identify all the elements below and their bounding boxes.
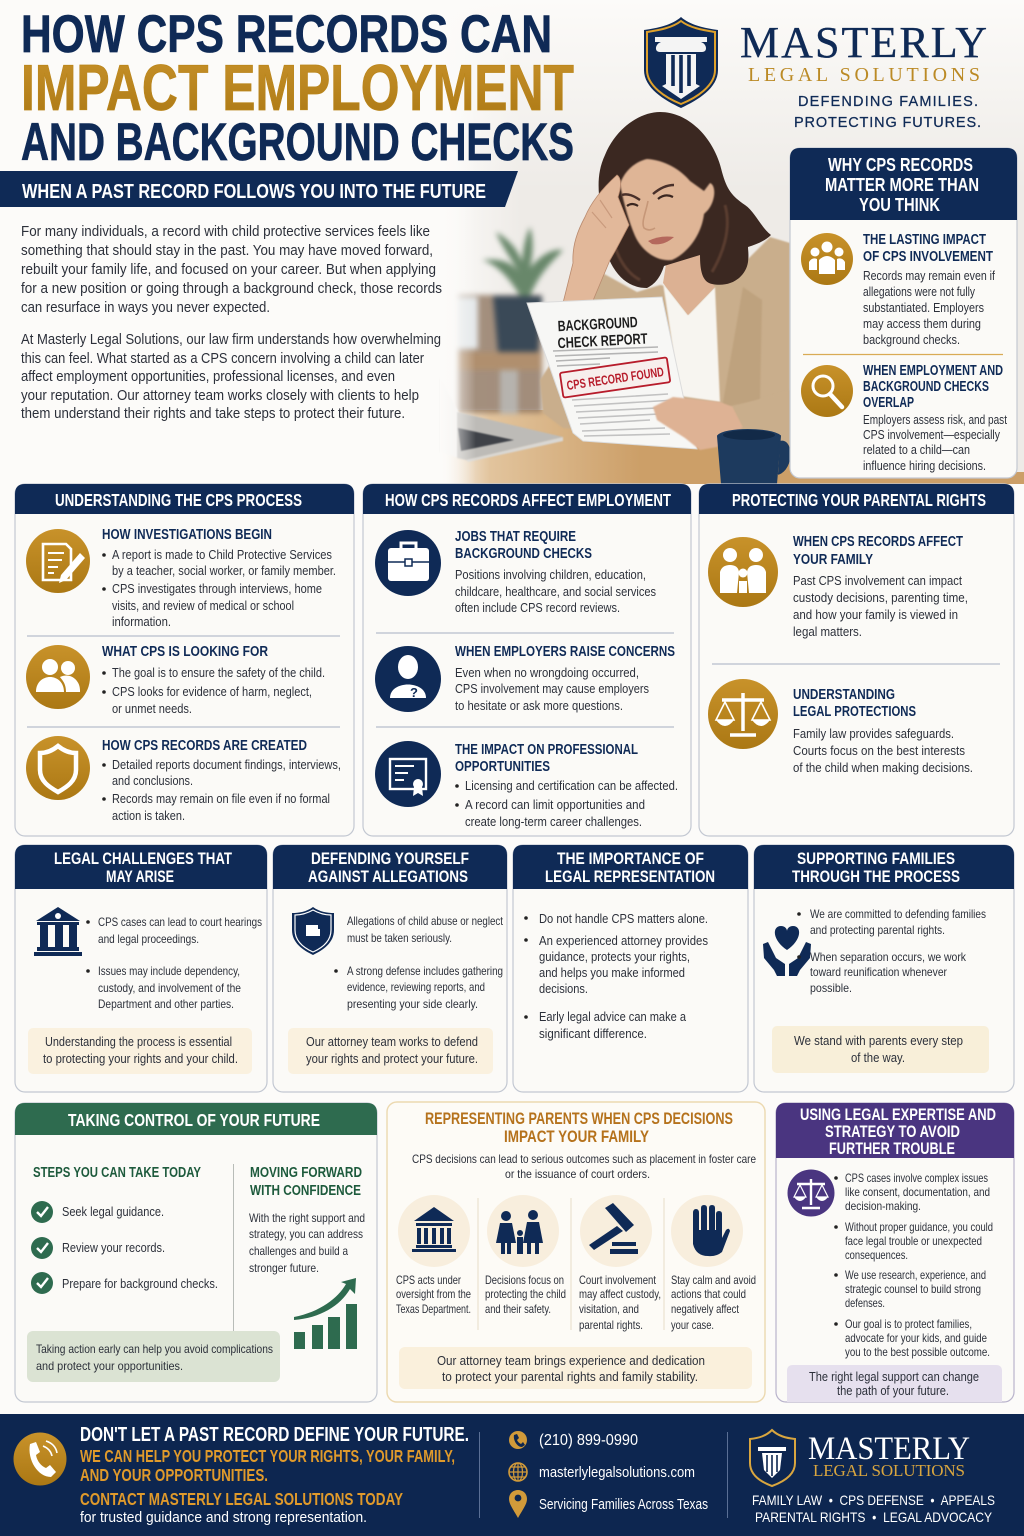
panel header bbox=[15, 1103, 377, 1135]
subtitle banner bbox=[0, 171, 518, 207]
section: how records are created bbox=[102, 738, 341, 823]
logo: Masterly Legal Solutions bbox=[644, 17, 987, 131]
callout: to protecting your rights and your child. bbox=[43, 1052, 238, 1066]
section: jobs requiring checks: JOBS THAT REQUIRE bbox=[455, 529, 576, 545]
background shelf and plant bbox=[458, 227, 563, 414]
section: when records affect family: and how your family is viewed in bbox=[793, 608, 958, 622]
panel title: REPRESENTING PARENTS WHEN CPS DECISIONS bbox=[425, 1110, 733, 1128]
footer logo: PARENTAL RIGHTS • LEGAL ADVOCACY bbox=[755, 1509, 993, 1525]
panel header: STRATEGY TO AVOID bbox=[825, 1123, 960, 1141]
text: moving forward: stronger future. bbox=[249, 1261, 319, 1275]
icon: courthouse bbox=[398, 1195, 470, 1267]
text: challenge bullets: and legal proceedings. bbox=[98, 932, 199, 946]
panel header bbox=[790, 148, 1017, 220]
text: expertise bullets: advocate for your kids, and guide bbox=[845, 1331, 987, 1345]
text: defense bullets: evidence, reviewing reports, and bbox=[347, 980, 485, 994]
hero photo: stressed woman reading background check report bbox=[440, 0, 1024, 484]
callout bbox=[772, 1026, 989, 1073]
text: representation bullets: guidance, protects your rights, bbox=[539, 950, 690, 964]
panel header bbox=[513, 845, 748, 889]
section: professional opportunities: create long-term career challenges. bbox=[465, 815, 642, 829]
icon: briefcase bbox=[375, 530, 441, 596]
icon: family group bbox=[801, 233, 853, 285]
icon: shield with column bbox=[644, 17, 718, 108]
main title: IMPACT EMPLOYMENT bbox=[21, 51, 574, 124]
intro paragraph two bbox=[21, 332, 441, 422]
section: how records are created: HOW CPS RECORDS ARE CREATED bbox=[102, 738, 307, 754]
logo: Masterly Legal Solutions: LEGAL SOLUTIONS bbox=[748, 64, 980, 86]
panel header: TAKING CONTROL OF YOUR FUTURE bbox=[68, 1110, 320, 1130]
text: defense bullets: must be taken seriously. bbox=[347, 931, 452, 945]
panel header bbox=[15, 845, 267, 889]
section: what CPS is looking for bbox=[102, 644, 325, 716]
section: lasting impact: OF CPS INVOLVEMENT bbox=[863, 249, 993, 265]
panel: taking control of your future bbox=[15, 1103, 377, 1402]
heading: steps you can take today: STEPS YOU CAN TAKE TODAY bbox=[33, 1165, 201, 1181]
section: lasting impact: substantiated. Employers bbox=[863, 301, 984, 315]
callout bbox=[787, 1365, 1002, 1402]
callout: of the way. bbox=[851, 1051, 905, 1065]
call to action text bbox=[80, 1423, 469, 1526]
panel: legal challenges that may arise bbox=[15, 845, 267, 1092]
hair bbox=[599, 112, 771, 288]
paper heading: BACKGROUND bbox=[557, 314, 638, 335]
section: how investigations begin: CPS investigates through interviews, home bbox=[112, 582, 322, 596]
text: expertise bullets: defenses. bbox=[845, 1296, 885, 1310]
main title: HOW CPS RECORDS CAN bbox=[21, 5, 552, 64]
footer band bbox=[0, 1414, 1024, 1536]
section: when records affect family: WHEN CPS RECORDS AFFECT bbox=[793, 534, 963, 550]
text: expertise bullets: Our goal is to protect families, bbox=[845, 1317, 972, 1331]
panel title bbox=[425, 1110, 733, 1146]
callout: to protect your parental rights and family stability. bbox=[442, 1370, 698, 1384]
section: how investigations begin: visits, and review of medical or school bbox=[112, 599, 294, 613]
panel header: THROUGH THE PROCESS bbox=[792, 868, 960, 886]
section: what CPS is looking for: WHAT CPS IS LOOKING FOR bbox=[102, 644, 268, 660]
heading: moving forward: WITH CONFIDENCE bbox=[250, 1183, 361, 1199]
neck bbox=[663, 240, 715, 315]
panel: importance of legal representation bbox=[513, 845, 748, 1092]
call to action text: CONTACT MASTERLY LEGAL SOLUTIONS TODAY bbox=[80, 1489, 403, 1509]
section: jobs requiring checks: Positions involving children, education, bbox=[455, 568, 646, 582]
callout bbox=[288, 1028, 493, 1074]
panel header bbox=[15, 484, 354, 514]
intro text: or the issuance of court orders. bbox=[505, 1167, 650, 1181]
intro paragraph two: them understand their rights and take steps to protect their future. bbox=[21, 406, 405, 422]
panel header: YOU THINK bbox=[859, 194, 941, 215]
text: expertise bullets bbox=[834, 1171, 993, 1359]
text: expertise bullets: like consent, documentation, and bbox=[845, 1185, 990, 1199]
columns of text: Court involvement bbox=[579, 1273, 657, 1287]
section: legal protections: UNDERSTANDING bbox=[793, 687, 895, 703]
callout: We stand with parents every step bbox=[794, 1034, 963, 1048]
intro paragraph one: something that should stay in the past. You may have moved forward, bbox=[21, 243, 433, 259]
section: legal protections bbox=[793, 687, 973, 775]
contact: phone: (210) 899-0990 bbox=[539, 1432, 638, 1449]
icon: shield bbox=[26, 736, 90, 800]
section: when records affect family: custody decisions, parenting time, bbox=[793, 591, 968, 605]
footer logo: LEGAL SOLUTIONS bbox=[813, 1461, 965, 1480]
text: expertise bullets: you to the best possible outcome. bbox=[845, 1345, 990, 1359]
contact: location: Servicing Families Across Texas bbox=[539, 1496, 708, 1513]
icon: scales bbox=[788, 1170, 834, 1216]
section: lasting impact: THE LASTING IMPACT bbox=[863, 232, 986, 248]
section: legal protections: LEGAL PROTECTIONS bbox=[793, 704, 916, 720]
callout: Our attorney team brings experience and dedication bbox=[437, 1354, 705, 1368]
intro paragraph one: For many individuals, a record with child protective services feels like bbox=[21, 224, 430, 240]
callout bbox=[399, 1347, 752, 1389]
intro paragraph two: your reputation. Our attorney team works closely with clients to help bbox=[21, 388, 419, 404]
text: representation bullets: An experienced attorney provides bbox=[539, 934, 708, 948]
text: support bullets: and protecting parental rights. bbox=[810, 923, 945, 937]
section: when records affect family bbox=[793, 534, 968, 639]
icon: phone bbox=[14, 1432, 66, 1486]
text: defense bullets bbox=[334, 914, 504, 1011]
columns of text: Texas Department. bbox=[396, 1302, 471, 1316]
columns of text: protecting the child bbox=[485, 1287, 566, 1301]
contact: location bbox=[509, 1490, 708, 1518]
intro text: CPS decisions can lead to serious outcomes such as placement in foster care bbox=[412, 1152, 756, 1166]
icon: person with question mark: ? bbox=[410, 685, 418, 700]
panel header: FURTHER TROUBLE bbox=[829, 1140, 955, 1158]
intro paragraph one: rebuilt your family life, and focused on your career. But when applying bbox=[21, 262, 436, 278]
text: moving forward bbox=[249, 1211, 365, 1275]
contact: phone bbox=[509, 1431, 638, 1449]
footer logo bbox=[750, 1430, 995, 1525]
CPS record found stamp: CPS RECORD FOUND bbox=[566, 364, 665, 393]
section: employment overlap: influence hiring decisions. bbox=[863, 459, 986, 473]
icon: gavel bbox=[580, 1195, 652, 1267]
panel header: AGAINST ALLEGATIONS bbox=[308, 868, 468, 886]
text: defense bullets: presenting your side clearly. bbox=[347, 997, 478, 1011]
icon: shield with column bbox=[750, 1430, 795, 1486]
section: what CPS is looking for: CPS looks for evidence of harm, neglect, bbox=[112, 685, 312, 699]
icon: certificate bbox=[375, 741, 441, 807]
section: legal protections: of the child when making decisions. bbox=[793, 761, 973, 775]
section: when records affect family: legal matters. bbox=[793, 625, 862, 639]
section: legal protections: Courts focus on the best interests bbox=[793, 744, 965, 758]
text: moving forward: With the right support and bbox=[249, 1211, 365, 1225]
intro paragraph one: for a new position or going through a background check, those records bbox=[21, 281, 442, 297]
text: defense bullets: Allegations of child abuse or neglect bbox=[347, 914, 504, 928]
face bbox=[620, 159, 714, 260]
columns of text: oversight from the bbox=[396, 1287, 471, 1301]
shirt bbox=[663, 283, 720, 402]
callout: and protect your opportunities. bbox=[36, 1359, 183, 1373]
columns of text: negatively affect bbox=[671, 1302, 740, 1316]
section: how investigations begin: A report is made to Child Protective Services bbox=[112, 548, 332, 562]
subtitle banner: WHEN A PAST RECORD FOLLOWS YOU INTO THE FUTURE bbox=[22, 180, 486, 203]
section: employment overlap bbox=[863, 363, 1007, 473]
intro paragraph one bbox=[21, 224, 442, 316]
panel header: LEGAL CHALLENGES THAT bbox=[54, 850, 232, 868]
text: expertise bullets: face legal trouble or unexpected bbox=[845, 1234, 982, 1248]
text: challenge bullets: Department and other parties. bbox=[98, 997, 234, 1011]
text: expertise bullets: consequences. bbox=[845, 1248, 908, 1262]
hand holding paper bbox=[653, 397, 743, 450]
callout: Taking action early can help you avoid complications bbox=[36, 1342, 273, 1356]
paper heading bbox=[556, 314, 648, 352]
text: moving forward: challenges and build a bbox=[249, 1244, 348, 1258]
panel: representing parents bbox=[387, 1102, 765, 1402]
section: when records affect family: YOUR FAMILY bbox=[793, 552, 873, 568]
panel: defending yourself bbox=[273, 845, 507, 1092]
section: employers raise concerns bbox=[455, 644, 675, 713]
section: jobs requiring checks: often include CPS record reviews. bbox=[455, 601, 620, 615]
intro paragraph one: can resurface in ways you never expected. bbox=[21, 300, 270, 316]
columns of text: may affect custody, bbox=[579, 1287, 661, 1301]
text: challenge bullets: Issues may include dependency, bbox=[98, 964, 240, 978]
logo: Masterly Legal Solutions: MASTERLY bbox=[740, 18, 987, 67]
icon: family bbox=[487, 1195, 559, 1267]
text: support bullets: possible. bbox=[810, 981, 852, 995]
icon: person with question mark bbox=[375, 646, 441, 712]
intro paragraph two: At Masterly Legal Solutions, our law firm understands how overwhelming bbox=[21, 332, 441, 348]
icon: parents and child bbox=[708, 537, 778, 607]
section: employment overlap: related to a child—can bbox=[863, 443, 970, 457]
call to action text: WE CAN HELP YOU PROTECT YOUR RIGHTS, YOUR FAMILY, bbox=[80, 1446, 455, 1466]
columns of text bbox=[396, 1273, 756, 1332]
checklist: Seek legal guidance. bbox=[62, 1205, 164, 1219]
text: challenge bullets: custody, and involvement of the bbox=[98, 981, 241, 995]
section: how records are created: action is taken. bbox=[112, 809, 185, 823]
section: employers raise concerns: to hesitate or ask more questions. bbox=[455, 699, 623, 713]
section: what CPS is looking for: or unmet needs. bbox=[112, 702, 192, 716]
logo: Masterly Legal Solutions: PROTECTING FUTURES. bbox=[794, 115, 981, 131]
coffee mug bbox=[718, 430, 790, 484]
intro paragraph two: affect employment opportunities, professional licenses, and even bbox=[21, 369, 395, 385]
section: jobs requiring checks: BACKGROUND CHECKS bbox=[455, 546, 592, 562]
section: professional opportunities: THE IMPACT ON PROFESSIONAL bbox=[455, 742, 638, 758]
section: what CPS is looking for: The goal is to ensure the safety of the child. bbox=[112, 666, 325, 680]
section: lasting impact: may access them during bbox=[863, 317, 981, 331]
heading: moving forward bbox=[250, 1165, 362, 1199]
text: challenge bullets bbox=[86, 915, 262, 1011]
icon: scales of justice bbox=[708, 679, 778, 749]
section: how investigations begin: HOW INVESTIGATIONS BEGIN bbox=[102, 527, 272, 543]
panel header: UNDERSTANDING THE CPS PROCESS bbox=[55, 490, 302, 510]
main title: AND BACKGROUND CHECKS bbox=[21, 113, 574, 172]
panel header: DEFENDING YOURSELF bbox=[311, 850, 469, 868]
section: how records are created: and conclusions. bbox=[112, 774, 193, 788]
panel: understanding the CPS process bbox=[15, 484, 354, 836]
report paper bbox=[527, 297, 697, 449]
call to action text: AND YOUR OPPORTUNITIES. bbox=[80, 1465, 268, 1485]
footer logo: MASTERLY bbox=[808, 1431, 970, 1467]
columns of text: actions that could bbox=[671, 1287, 746, 1301]
text: expertise bullets: strategic counsel to build strong bbox=[845, 1282, 981, 1296]
main title bbox=[21, 5, 574, 172]
section: how records are created: Records may remain on file even if no formal bbox=[112, 792, 330, 806]
columns of text: visitation, and bbox=[579, 1302, 639, 1316]
panel header: LEGAL REPRESENTATION bbox=[545, 868, 715, 886]
text: expertise bullets: We use research, experience, and bbox=[845, 1268, 986, 1282]
laptop bbox=[440, 378, 563, 462]
hand on forehead bbox=[563, 175, 629, 303]
panel: supporting families bbox=[754, 845, 1014, 1092]
icon: heart in hands bbox=[763, 926, 811, 976]
callout: your rights and protect your future. bbox=[306, 1052, 478, 1066]
text: representation bullets: Early legal advice can make a bbox=[539, 1010, 686, 1024]
section: employment overlap: CPS involvement—especially bbox=[863, 428, 1001, 442]
text: expertise bullets: CPS cases involve complex issues bbox=[845, 1171, 988, 1185]
section: employment overlap: OVERLAP bbox=[863, 395, 914, 411]
icon: raised hand bbox=[671, 1195, 743, 1267]
text: moving forward: strategy, you can address bbox=[249, 1227, 363, 1241]
panel header: WHY CPS RECORDS bbox=[828, 154, 973, 175]
panel header bbox=[776, 1103, 1014, 1158]
icon: courthouse bbox=[34, 907, 82, 956]
call to action text: for trusted guidance and strong representation. bbox=[80, 1510, 367, 1526]
panel header: MATTER MORE THAN bbox=[825, 174, 979, 195]
panel: protecting your parental rights bbox=[699, 484, 1014, 836]
callout: The right legal support can change bbox=[809, 1370, 979, 1384]
contact: website: masterlylegalsolutions.com bbox=[539, 1464, 695, 1481]
icon: growth chart with arrow bbox=[294, 1278, 357, 1349]
callout: the path of your future. bbox=[837, 1384, 949, 1398]
columns of text: your case. bbox=[671, 1318, 714, 1332]
callout bbox=[28, 1028, 252, 1074]
checklist: Prepare for background checks. bbox=[62, 1277, 218, 1291]
call to action text: DON'T LET A PAST RECORD DEFINE YOUR FUTURE. bbox=[80, 1423, 469, 1446]
columns of text: CPS acts under bbox=[396, 1273, 461, 1287]
section: legal protections: Family law provides safeguards. bbox=[793, 727, 954, 741]
text: support bullets: When separation occurs, we work bbox=[810, 950, 966, 964]
callout: Our attorney team works to defend bbox=[306, 1035, 478, 1049]
heading: moving forward: MOVING FORWARD bbox=[250, 1165, 362, 1181]
section: how investigations begin: information. bbox=[112, 615, 171, 629]
text: representation bullets: decisions. bbox=[539, 982, 588, 996]
panel header bbox=[754, 845, 1014, 889]
section: how records are created: Detailed reports document findings, interviews, bbox=[112, 758, 341, 772]
columns of text: Stay calm and avoid bbox=[671, 1273, 756, 1287]
paper heading: CHECK REPORT bbox=[557, 331, 648, 352]
section: lasting impact: allegations were not fully bbox=[863, 285, 976, 299]
panel header: THE IMPORTANCE OF bbox=[557, 850, 704, 868]
icon: document and pencil bbox=[26, 529, 90, 593]
text: support bullets: toward reunification whenever bbox=[810, 965, 947, 979]
section: how investigations begin: by a teacher, social worker, or family member. bbox=[112, 564, 336, 578]
checklist bbox=[31, 1201, 218, 1294]
text: representation bullets: significant difference. bbox=[539, 1027, 647, 1041]
text: defense bullets: A strong defense includes gathering bbox=[347, 964, 503, 978]
section: lasting impact: Records may remain even if bbox=[863, 269, 995, 283]
panel header: MAY ARISE bbox=[106, 868, 174, 886]
section: employers raise concerns: Even when no wrongdoing occurred, bbox=[455, 666, 639, 680]
section: lasting impact: background checks. bbox=[863, 333, 960, 347]
section: professional opportunities: OPPORTUNITIES bbox=[455, 759, 550, 775]
columns of text: Decisions focus on bbox=[485, 1273, 564, 1287]
panel header bbox=[699, 484, 1014, 514]
section: when records affect family: Past CPS involvement can impact bbox=[793, 574, 962, 588]
section: professional opportunities: Licensing and certification can be affected. bbox=[465, 779, 678, 793]
section: professional opportunities: A record can limit opportunities and bbox=[465, 798, 645, 812]
panel header bbox=[363, 484, 691, 514]
panel: how CPS records affect employment bbox=[363, 484, 691, 836]
panel header bbox=[273, 845, 507, 889]
section: professional opportunities bbox=[455, 742, 678, 829]
section: employers raise concerns: WHEN EMPLOYERS RAISE CONCERNS bbox=[455, 644, 675, 660]
callout bbox=[27, 1331, 280, 1382]
intro paragraph two: this can feel. What started as a CPS concern involving a child can later bbox=[21, 351, 424, 367]
icon: shield with gavel bbox=[292, 907, 334, 955]
section: jobs requiring checks bbox=[455, 529, 656, 615]
text: representation bullets: and helps you make informed bbox=[539, 966, 685, 980]
text: support bullets bbox=[797, 907, 986, 995]
intro text bbox=[412, 1152, 756, 1181]
panel: why CPS records matter bbox=[790, 148, 1017, 478]
callout: Understanding the process is essential bbox=[45, 1035, 232, 1049]
icon: magnifying glass bbox=[801, 365, 853, 417]
section: employers raise concerns: CPS involvement may cause employers bbox=[455, 682, 649, 696]
cardigan bbox=[540, 237, 790, 445]
logo: Masterly Legal Solutions: DEFENDING FAMILIES. bbox=[798, 94, 978, 110]
text: support bullets: We are committed to defending families bbox=[810, 907, 986, 921]
columns of text: and their safety. bbox=[485, 1302, 551, 1316]
text: expertise bullets: decision-making. bbox=[845, 1199, 921, 1213]
icon: two people bbox=[26, 645, 90, 709]
panel title: IMPACT YOUR FAMILY bbox=[504, 1128, 649, 1146]
text: challenge bullets: CPS cases can lead to court hearings bbox=[98, 915, 262, 929]
CPS record found stamp bbox=[560, 357, 670, 398]
section: how investigations begin bbox=[102, 527, 336, 629]
text: representation bullets: Do not handle CPS matters alone. bbox=[539, 912, 708, 926]
columns of text: parental rights. bbox=[579, 1318, 643, 1332]
checklist: Review your records. bbox=[62, 1241, 165, 1255]
section: lasting impact bbox=[863, 232, 995, 347]
panel: using legal expertise bbox=[776, 1103, 1014, 1402]
panel header: HOW CPS RECORDS AFFECT EMPLOYMENT bbox=[385, 490, 671, 510]
text: representation bullets bbox=[524, 912, 708, 1041]
section: jobs requiring checks: childcare, healthcare, and social services bbox=[455, 585, 656, 599]
panel header: SUPPORTING FAMILIES bbox=[797, 850, 955, 868]
